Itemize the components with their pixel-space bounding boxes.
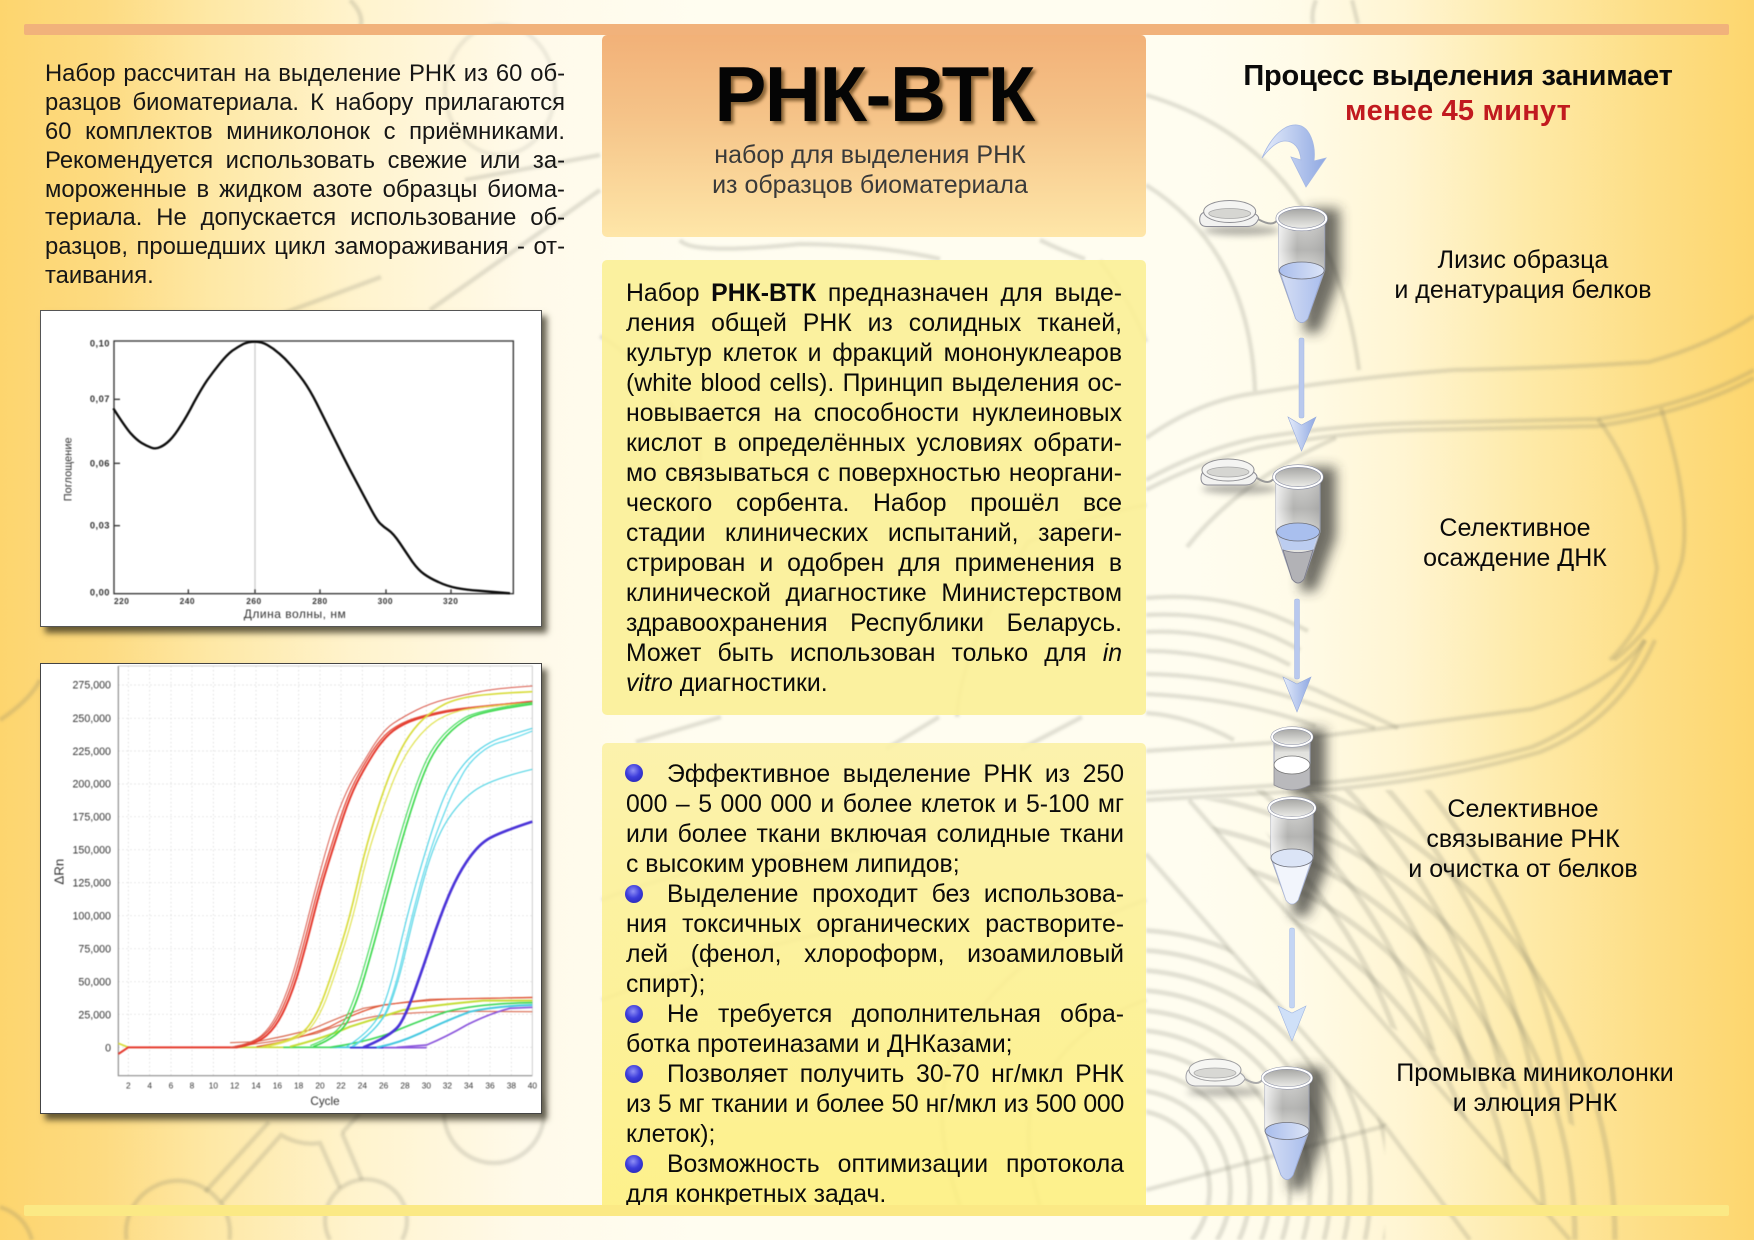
y axis labels: 0,03	[90, 521, 110, 531]
x axis labels: 38	[507, 1080, 516, 1090]
item 2	[625, 881, 1124, 998]
x axis labels: 14	[251, 1080, 261, 1090]
description text: ческого сорбента. Набор прошёл все	[626, 490, 1122, 517]
intro text: мороженные в жидком азоте образцы биома-	[45, 176, 565, 203]
arrow 3	[1278, 928, 1306, 1041]
tube 4: elution	[1186, 1059, 1325, 1190]
chart: absorption spectrum	[40, 310, 542, 627]
description text: клинической диагностике Министерством	[626, 580, 1122, 607]
column	[1272, 728, 1326, 795]
y axis labels: 150,000	[72, 845, 111, 857]
x axis labels: 34	[464, 1080, 474, 1090]
x axis labels: 6	[169, 1080, 174, 1090]
x axis labels: 300	[378, 596, 393, 606]
bottom bar	[24, 1205, 1729, 1216]
axis titles: Cycle	[310, 1095, 340, 1108]
y axis labels: 125,000	[72, 877, 111, 889]
x axis labels: 40	[528, 1080, 537, 1090]
process heading: менее 45 минут	[1345, 95, 1571, 127]
step label 2: осаждение ДНК	[1423, 544, 1607, 572]
item 4	[625, 1061, 1124, 1148]
x axis labels: 240	[180, 596, 195, 606]
step label 3: и очистка от белков	[1408, 855, 1638, 883]
x axis labels	[126, 1080, 537, 1090]
title: РНК-ВТК	[714, 50, 1034, 138]
y axis labels: 100,000	[72, 911, 111, 923]
curve	[113, 342, 510, 593]
y axis labels	[90, 339, 110, 598]
y axis labels: 0,06	[90, 458, 110, 468]
axes	[114, 341, 513, 594]
description text: (white blood cells). Принцип выделения ос-	[626, 370, 1122, 397]
x axis labels: 18	[294, 1080, 304, 1090]
description text: стадии клинических испытаний, зареги-	[626, 520, 1122, 547]
curved arrow	[1262, 125, 1326, 187]
description text: Может быть использован только для in	[626, 640, 1122, 667]
x axis labels: 22	[336, 1080, 346, 1090]
tube 3: column and receiver	[1269, 728, 1328, 916]
amplification plot	[52, 665, 538, 1108]
x axis labels: 32	[443, 1080, 452, 1090]
y axis labels	[72, 680, 111, 1054]
x axis labels: 2	[126, 1080, 131, 1090]
step label 1	[1394, 246, 1652, 304]
item 3: Не требуется дополнительная обра-	[667, 1001, 1124, 1028]
description text: мо связываться с поверхностью неоргани-	[626, 460, 1122, 487]
panel: advantages	[602, 743, 1146, 1213]
x axis labels: 28	[400, 1080, 410, 1090]
y axis labels: 0,00	[90, 588, 110, 598]
step label 2	[1423, 514, 1607, 572]
intro text: Набор рассчитан на выделение РНК из 60 об-	[45, 60, 565, 87]
intro text: разцов биоматериала. К набору прилагаются	[45, 89, 565, 116]
arrow 1	[1288, 338, 1316, 451]
panel: description	[602, 260, 1146, 715]
step label 4: Промывка миниколонки	[1396, 1059, 1674, 1087]
x axis labels: 30	[422, 1080, 431, 1090]
description text: Набор РНК-ВТК предназначен для выде-	[626, 280, 1122, 307]
subtitle: набор для выделения РНК	[714, 141, 1026, 169]
x axis labels	[114, 596, 458, 606]
x axis labels: 4	[147, 1080, 152, 1090]
y axis labels: 175,000	[72, 812, 111, 824]
item 1: с высоким уровнем липидов;	[626, 851, 960, 878]
y axis labels: 0,07	[90, 394, 110, 404]
item 1: Эффективное выделение РНК из 250	[667, 761, 1124, 788]
y axis labels: 25,000	[78, 1009, 111, 1021]
process heading: Процесс выделения занимает	[1243, 60, 1673, 92]
intro text: териала. Не допускается использование об-	[45, 204, 565, 231]
item 1: 000 – 5 000 000 и более клеток и 5-100 мг	[626, 791, 1124, 818]
x axis labels: 280	[312, 596, 328, 606]
lid	[1200, 200, 1279, 226]
item 1	[625, 761, 1124, 878]
x axis labels: 16	[273, 1080, 282, 1090]
absorption plot: Поглощение	[63, 437, 75, 501]
step label 1: Лизис образца	[1438, 246, 1608, 274]
y axis labels: 275,000	[72, 680, 111, 692]
x axis labels: 10	[209, 1080, 218, 1090]
intro text: 60 комплектов миниколонок с приёмниками.	[45, 118, 565, 145]
chart: amplification curves	[40, 663, 542, 1114]
lid	[1186, 1059, 1264, 1086]
y axis labels: 75,000	[78, 944, 111, 956]
receiver	[1269, 798, 1328, 916]
description text: здравоохранения Республики Беларусь.	[626, 610, 1122, 637]
low plateau curves	[230, 997, 532, 1047]
step label 3	[1408, 795, 1638, 883]
step label 4	[1396, 1059, 1674, 1117]
description text: vitro диагностики.	[626, 670, 828, 697]
y axis labels: 0,10	[90, 339, 110, 349]
axis titles: Длина волны, нм	[244, 607, 346, 621]
x axis labels: 8	[190, 1080, 195, 1090]
item 4: из 5 мг ткании и более 50 нг/мкл из 500 000	[626, 1091, 1124, 1118]
x axis labels: 12	[230, 1080, 240, 1090]
intro text: Рекомендуется использовать свежие или за-	[45, 147, 565, 174]
step label 3: Селективное	[1447, 795, 1599, 823]
lid	[1201, 459, 1275, 485]
item 2: Выделение проходит без использова-	[667, 881, 1124, 908]
item 3	[625, 1001, 1124, 1058]
item 4: Позволяет получить 30-70 нг/мкл РНК	[667, 1061, 1124, 1088]
x axis labels: 36	[485, 1080, 495, 1090]
y axis labels: 250,000	[72, 713, 111, 725]
x axis labels: 320	[443, 596, 458, 606]
y axis labels: 200,000	[72, 779, 111, 791]
intro text: таивания.	[45, 262, 154, 289]
tube 2: precipitation	[1201, 459, 1336, 591]
intro text: разцов, прошедших цикл замораживания - от-	[45, 233, 565, 260]
y axis labels: 50,000	[78, 977, 111, 989]
baseline segments	[237, 1045, 427, 1050]
description text: культур клеток и фракций мононуклеаров	[626, 340, 1122, 367]
description text: новывается на способности нуклеиновых	[626, 400, 1122, 427]
step label 4: и элюция РНК	[1453, 1089, 1617, 1117]
advantages list	[625, 761, 1124, 1208]
description text: ления общей РНК из солидных тканей,	[626, 310, 1122, 337]
step label 2: Селективное	[1439, 514, 1591, 542]
description text	[626, 280, 1122, 697]
item 3: ботка протеиназами и ДНКазами;	[626, 1031, 1013, 1058]
tube 1: lysis	[1200, 200, 1340, 332]
x axis labels: 220	[114, 596, 129, 606]
grid	[118, 666, 532, 1076]
x axis labels: 20	[315, 1080, 325, 1090]
item 4: клеток);	[626, 1121, 715, 1148]
subtitle	[712, 141, 1028, 199]
item 2: лей (фенол, хлороформ, изоамиловый	[626, 941, 1124, 968]
panel: title	[602, 35, 1146, 237]
step label 3: связывание РНК	[1426, 825, 1620, 853]
arrow 2	[1283, 599, 1311, 712]
process heading	[1243, 60, 1673, 127]
x axis labels: 24	[358, 1080, 367, 1090]
amplification curves	[118, 686, 532, 1054]
item 2: ния токсичных органических растворите-	[626, 911, 1124, 938]
item 5	[625, 1151, 1124, 1208]
x axis labels: 260	[246, 596, 262, 606]
description text: стрирован и одобрен для применения в	[626, 550, 1122, 577]
description text: кислот в определённых условиях обрати-	[626, 430, 1122, 457]
intro text	[45, 60, 565, 289]
item 1: или более ткани включая солидные ткани	[626, 821, 1124, 848]
item 5: Возможность оптимизации протокола	[667, 1151, 1124, 1178]
item 5: для конкретных задач.	[626, 1181, 886, 1208]
subtitle: из образцов биоматериала	[712, 171, 1028, 199]
y axis labels: 0	[105, 1042, 111, 1054]
absorption plot	[63, 339, 515, 622]
y axis labels: 225,000	[72, 746, 111, 758]
amplification plot: ΔRn	[52, 859, 67, 885]
step label 1: и денатурация белков	[1394, 276, 1652, 304]
top bar	[24, 24, 1729, 35]
item 2: спирт);	[626, 971, 705, 998]
x axis labels: 26	[379, 1080, 389, 1090]
